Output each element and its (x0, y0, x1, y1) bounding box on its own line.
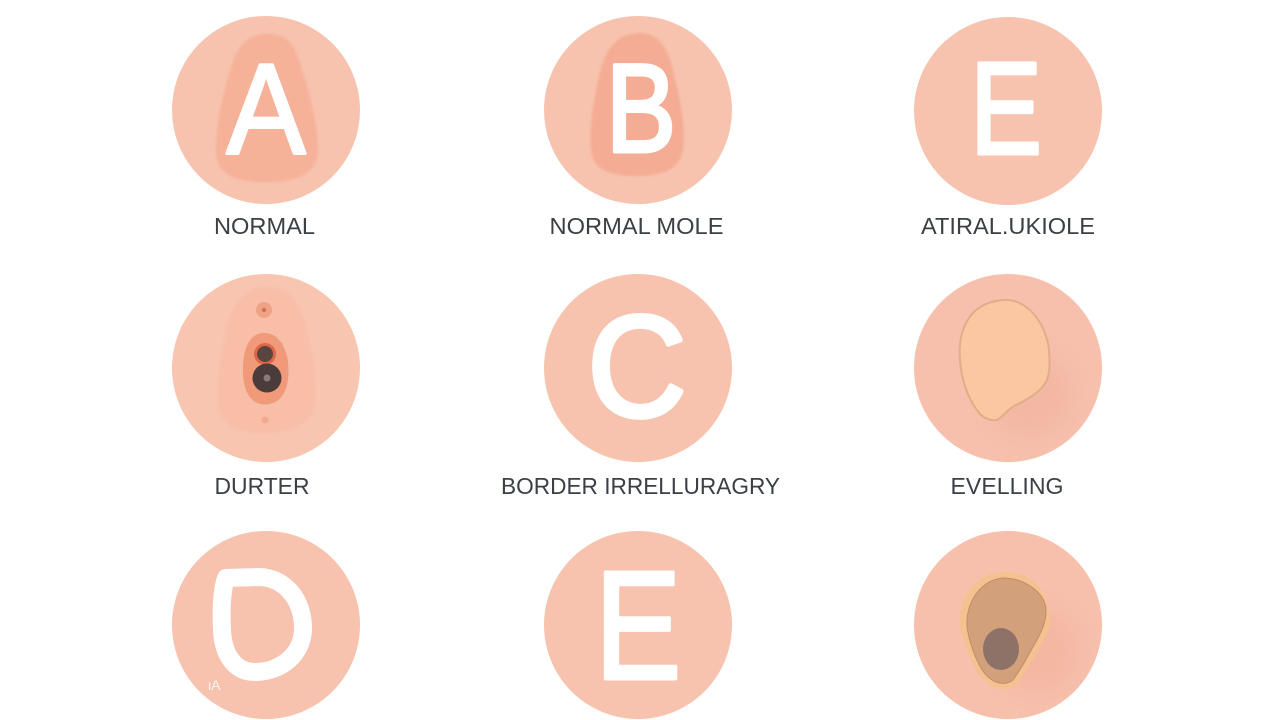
letter D (222, 577, 303, 672)
label: border irregularity: BORDER IRRELLURAGRY (501, 473, 780, 499)
letter E: E (970, 36, 1042, 182)
icon: top spot (256, 302, 272, 318)
infographic grid (172, 16, 1102, 719)
letter B: B (606, 40, 676, 179)
letter C: C (588, 286, 686, 447)
panel: D (172, 531, 360, 719)
panel: evolving dark mole (914, 531, 1102, 719)
letter A: A (226, 38, 306, 182)
icon: bottom spot (262, 416, 268, 424)
icon: small mark: ιA (208, 677, 221, 693)
label: diameter: DURTER (214, 473, 310, 499)
panel: E (544, 531, 732, 719)
panel: C border irregularity (501, 274, 780, 499)
label: evelling: EVELLING (950, 473, 1064, 499)
label: normal mole: NORMAL MOLE (550, 213, 724, 239)
label: normal: NORMAL (214, 213, 315, 239)
panel: B normal mole (544, 16, 732, 239)
icon: swelling shape (960, 300, 1050, 420)
panel: diameter mole (172, 274, 360, 499)
icon: central lesion (243, 333, 288, 404)
panel: evolving swelling (914, 274, 1102, 499)
icon: mole dark centre (983, 628, 1019, 670)
panel: E atypical mole (914, 17, 1102, 239)
label: atypical mole: ATIRAL.UKIOLE (921, 213, 1095, 239)
icon: mole inner (967, 578, 1046, 683)
icon: mole outer (960, 572, 1050, 689)
panel: A normal (172, 16, 360, 239)
letter E: E (595, 540, 681, 712)
